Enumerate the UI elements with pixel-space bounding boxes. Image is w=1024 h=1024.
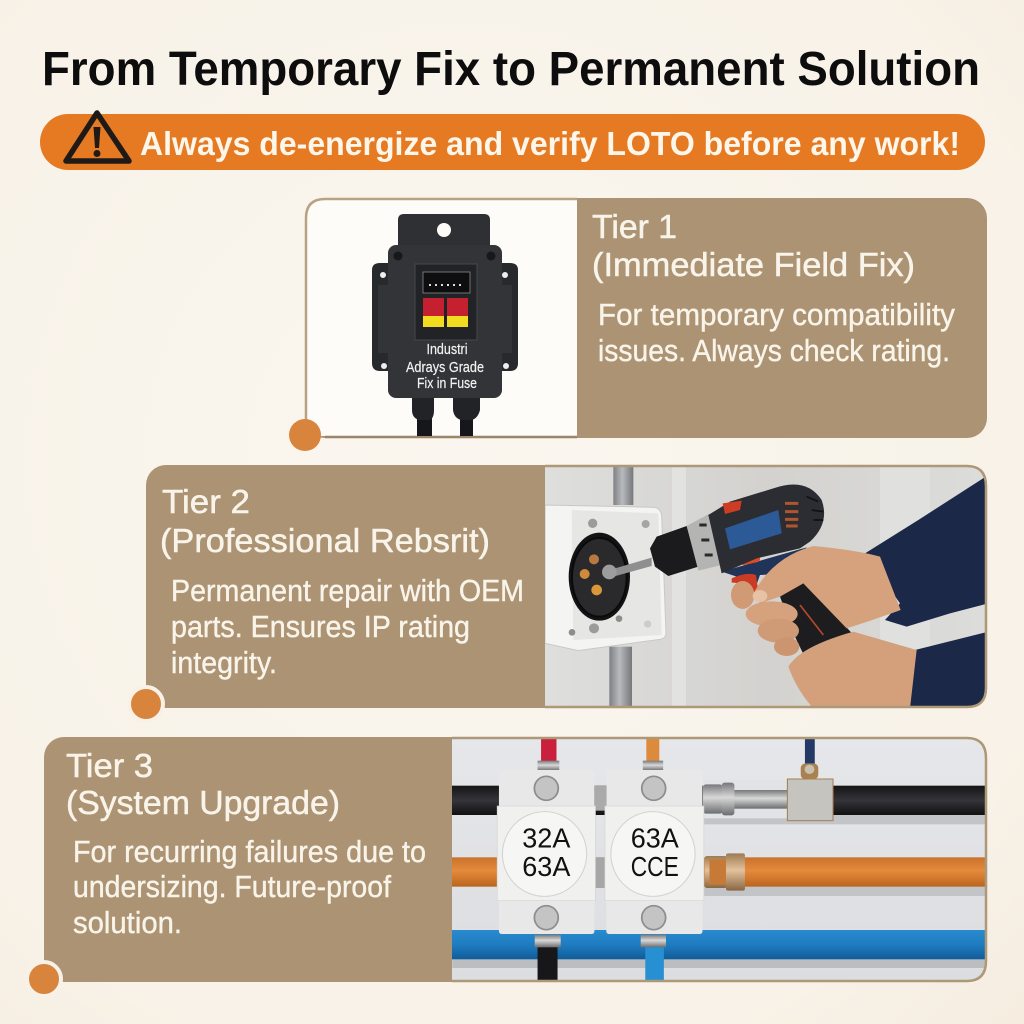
tier 2 description: Permanent repair with OEM — [171, 573, 524, 608]
pipe shadows — [703, 815, 987, 824]
sleeves — [865, 475, 988, 627]
black pipe — [451, 786, 987, 815]
tier 2 description: integrity. — [171, 645, 277, 680]
device label: Industri — [426, 342, 468, 358]
cables — [417, 415, 473, 436]
breaker left: 63A — [522, 852, 571, 882]
lower hand — [788, 632, 917, 708]
tier 1 description: issues. Always check rating. — [598, 333, 950, 368]
vertical cables — [541, 739, 556, 761]
blue pipe — [451, 930, 987, 959]
tier 3 description — [73, 834, 426, 940]
metal fitting — [703, 790, 787, 809]
junction box — [545, 505, 666, 651]
mounting ears — [372, 263, 518, 371]
tier 2 heading — [160, 483, 490, 559]
tee junction — [787, 779, 833, 821]
banner text: Always de-energize and verify LOTO before any work! — [140, 125, 960, 162]
title: From Temporary Fix to Permanent Solution — [42, 43, 980, 96]
drill lower body — [724, 547, 807, 583]
tier 1 description: For temporary compatibility — [598, 297, 955, 332]
drill chuck — [650, 526, 698, 576]
top tab — [398, 214, 490, 250]
tier 1 description — [598, 297, 955, 368]
panel: tier 2 — [129, 465, 988, 721]
tier 3 description: undersizing. Future-proof — [73, 869, 391, 904]
tier 1 heading — [592, 208, 915, 283]
tier 2 heading: (Professional Rebsrit) — [160, 522, 490, 559]
panel background — [146, 465, 987, 708]
breaker right — [605, 770, 704, 934]
orange pipe — [451, 857, 987, 887]
panel background — [305, 198, 987, 438]
drill display — [725, 510, 782, 549]
tier 2 description — [171, 573, 524, 680]
tier 3 heading: (System Upgrade) — [66, 784, 340, 821]
panel background — [44, 737, 987, 982]
image area: system upgrade — [451, 737, 987, 982]
tier 1 marker — [289, 419, 321, 451]
drill grip — [780, 580, 852, 654]
drill bit — [615, 558, 652, 576]
device body — [388, 245, 502, 398]
warning banner — [40, 113, 985, 170]
tier 3 description: For recurring failures due to — [73, 834, 426, 869]
panel: tier 1 — [289, 198, 987, 451]
device label — [406, 342, 484, 392]
bottom nipples and cables — [538, 947, 558, 982]
socket — [569, 533, 630, 621]
tier 3 heading: Tier 3 — [66, 747, 153, 784]
device label: Adrays Grade — [406, 360, 484, 376]
tier 3 marker — [27, 962, 61, 996]
tier 3 heading — [66, 747, 340, 821]
panel: tier 3 — [27, 737, 987, 996]
tier 2 description: parts. Ensures IP rating — [171, 609, 470, 644]
drill collar — [687, 513, 722, 571]
breaker right: 63A — [631, 823, 679, 853]
banner background — [40, 114, 985, 170]
top nipples — [538, 761, 559, 771]
fuse window — [415, 264, 477, 340]
icon: warning triangle — [66, 113, 129, 161]
image area: field fix device — [306, 199, 577, 437]
device label: Fix in Fuse — [417, 376, 477, 392]
copper fitting — [705, 856, 727, 888]
tier 1 heading: Tier 1 — [592, 208, 677, 245]
breaker right: CCE — [631, 852, 679, 882]
hand — [753, 546, 901, 628]
tier 1 heading: (Immediate Field Fix) — [592, 246, 915, 283]
breaker left: 32A — [522, 823, 571, 853]
tier 2 marker — [129, 687, 163, 721]
breaker left — [497, 770, 595, 934]
image area: drill repair — [545, 467, 988, 710]
tier 2 heading: Tier 2 — [162, 483, 250, 520]
conduit pipes — [613, 467, 633, 505]
tier 3 description: solution. — [73, 905, 182, 940]
drill body — [708, 484, 824, 573]
